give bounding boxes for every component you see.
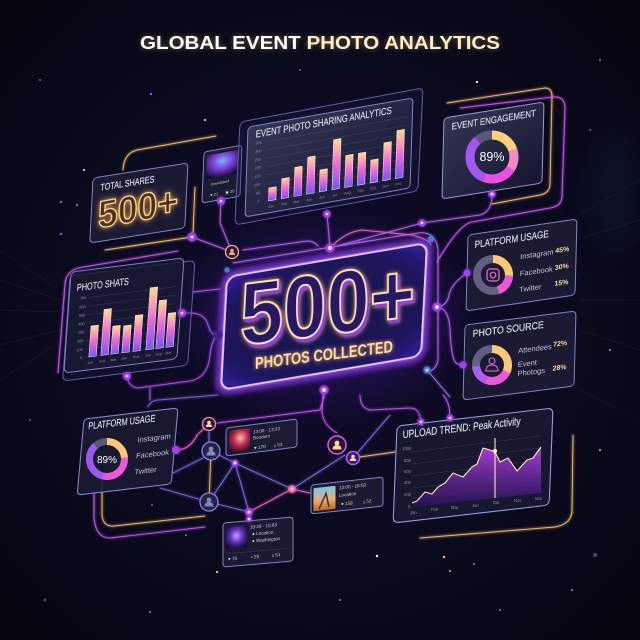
panel: photo card top: ♥ 21 (210, 191, 219, 198)
connector network (58, 88, 573, 538)
bottom network (176, 424, 310, 512)
icon: person node a (202, 418, 216, 430)
bar chart: monthly shares: 150 (254, 174, 261, 179)
legend: platforms: Twitter (519, 282, 542, 294)
card: booths: Boodom (253, 433, 270, 441)
icon: person node c (200, 493, 218, 511)
line chart: uploads over time: 200 (404, 492, 412, 497)
line chart: uploads over time: Jun (472, 503, 479, 508)
card: washington: ▪ 29 (251, 554, 259, 560)
legend: platforms (519, 247, 554, 294)
legend: sources (517, 342, 552, 378)
icon: person node d (328, 436, 346, 454)
card: booths: ⤓ 53 (274, 442, 283, 448)
bar chart: monthly shares: 100 (254, 182, 260, 188)
bar chart: photo shots: Jun (145, 353, 151, 358)
panel: platform usage right: 15% (554, 279, 569, 288)
legend: platforms: Instagram (520, 247, 554, 261)
bar chart: photo shots: 400 (78, 322, 85, 327)
legend: sources: Attendees (518, 342, 552, 355)
line chart: uploads over time (402, 436, 543, 515)
card: washington (223, 517, 293, 567)
heading: event photo sharing analytics: EVENT PHOTO SHARING ANALYTICS (256, 106, 392, 141)
bar chart: monthly shares: Feb (281, 202, 287, 207)
bar chart: monthly shares: Sen (382, 184, 389, 189)
line chart: uploads over time: Mar (535, 496, 543, 501)
gold frame lines (105, 136, 216, 250)
caption: photos collected: PHOTOS COLLECTED (255, 337, 393, 373)
donut: 89% (470, 135, 514, 179)
photo: stage (226, 525, 247, 549)
panel: photo shats (63, 258, 195, 381)
donut: 89% (90, 442, 124, 476)
title: GLOBAL EVENT PHOTO ANALYTICS (140, 33, 500, 53)
heading: platform usage: PLATFORM USAGE (475, 229, 549, 251)
bar chart: monthly shares: 50 (256, 191, 260, 196)
bar chart: photo shots: 700 (80, 296, 86, 301)
bar chart: monthly shares: 250 (255, 157, 261, 163)
card: washington: 10:29 - 15:63 (250, 522, 277, 530)
panel: photo card top: ▣ 20 (225, 188, 235, 195)
panel: upload trend (393, 408, 553, 523)
legend: platforms: Facebook (136, 448, 170, 460)
panel: event photo sharing analytics (235, 88, 423, 225)
bar chart: photo shots: Mar (110, 357, 118, 362)
photo: desert (314, 486, 336, 511)
panel: platform usage right: 30% (555, 263, 570, 272)
bar chart: photo shots: 0 (80, 356, 82, 360)
card: booths: 13:00 - 13:33 (253, 426, 280, 435)
card: location: Location (339, 491, 357, 498)
legend: sources: Photogs (517, 366, 545, 378)
magenta frame lines (58, 97, 565, 538)
nodes (123, 190, 496, 522)
heading: photo shats: PHOTO SHATS (76, 277, 129, 294)
line chart: uploads over time: 1000 (402, 446, 412, 451)
legend: sources: Event (518, 358, 538, 369)
bar chart: photo shots: Jun (121, 356, 127, 361)
panel: event engagement (442, 102, 544, 199)
line chart: uploads over time: 800 (404, 458, 412, 463)
stat: 500+: 500+ (98, 180, 178, 237)
legend: platforms: Instagram (137, 432, 171, 444)
panel: photo source: 72% (553, 340, 568, 349)
card: location: ⤓ 52 (363, 498, 372, 504)
card: booths: ♥ 170 (254, 444, 266, 450)
card: washington: ♥ 75 (228, 556, 238, 562)
legend: platforms: Facebook (520, 264, 553, 278)
heading: total shares: TOTAL SHARES (100, 174, 155, 194)
bar chart: photo shots: 200 (77, 339, 83, 344)
heading: event engagement: EVENT ENGAGEMENT (452, 108, 536, 133)
panel: platform usage right (466, 219, 577, 311)
card: washington: ● Washington (252, 536, 281, 544)
panel: photo source: 28% (552, 364, 567, 373)
bar chart: monthly shares: Oct (370, 186, 376, 191)
panel: platform usage left (77, 408, 178, 495)
bar chart: photo shots: 600 (79, 305, 86, 310)
line chart: uploads over time: Jan (410, 510, 417, 515)
central links (192, 194, 492, 372)
panel: central stat (218, 239, 430, 394)
bar chart: photo shots: Mar (165, 351, 173, 355)
panel: total shares (90, 163, 188, 243)
card: location (311, 477, 383, 514)
bar chart: monthly shares: Apr (306, 197, 313, 202)
line chart: uploads over time: Nov (514, 498, 522, 503)
legend: platforms: Twitter (134, 465, 158, 476)
bar chart: monthly shares: Mar (293, 199, 300, 205)
bar chart: monthly shares: Jan (268, 204, 274, 209)
line chart: uploads over time: Mar (451, 505, 459, 510)
bar chart: photo shots (75, 284, 178, 367)
icon: person node e (346, 452, 360, 464)
bar chart: photo shots: Jan (87, 360, 93, 365)
icon: person node top (226, 246, 238, 258)
bar chart: monthly shares: Aug (344, 190, 351, 196)
bar chart: monthly shares: 0 (257, 200, 260, 204)
bar chart: monthly shares (253, 115, 407, 212)
bar chart: photo shots: Sep (155, 352, 162, 357)
donut: source share (476, 349, 508, 381)
photo: fireworks (229, 428, 250, 453)
bar chart: photo shots: Year (132, 355, 141, 359)
line chart: uploads over time: 600 (404, 469, 412, 474)
bar chart: monthly shares: Jul (332, 193, 337, 198)
heading: platform usage: PLATFORM USAGE (88, 414, 156, 432)
stat: 500+: 500+ (240, 243, 415, 364)
bar chart: monthly shares: Dec (395, 181, 402, 187)
bar chart: monthly shares: 200 (255, 165, 261, 171)
legend: platforms (134, 432, 171, 476)
line chart: uploads over time: Sat (493, 500, 500, 505)
panel: photo source (463, 311, 576, 400)
line chart: uploads over time: 400 (404, 480, 412, 485)
bar chart: photo shots: Fes (99, 359, 106, 364)
panel: photo card top: Uoundstred (211, 179, 229, 187)
line chart: uploads over time: Feb (431, 507, 439, 512)
line chart: uploads over time: 0 (408, 504, 411, 509)
panel: event engagement: 89% (479, 150, 505, 164)
card: location: ♥ 158 (341, 500, 353, 507)
bar chart: photo shots: 100 (76, 348, 83, 353)
card: washington: ● Location (252, 530, 274, 537)
photo: concert (206, 150, 239, 179)
icon: person (486, 358, 498, 371)
panel: photo card top (202, 145, 242, 203)
heading: upload trend: UPLOAD TREND: Peak Activity (402, 416, 521, 441)
card: washington: ⤓ 51 (272, 552, 281, 558)
card: booths (226, 419, 297, 456)
panel: platform usage left: 89% (97, 455, 117, 466)
card: location: 13:00 - 16:50 (339, 482, 367, 490)
bar chart: photo shots: 500 (79, 313, 85, 318)
donut: platform share (477, 259, 509, 291)
bar chart: monthly shares: 300 (255, 140, 262, 146)
bar chart: photo shots: 300 (77, 330, 84, 335)
bar chart: monthly shares: 300 (255, 149, 262, 154)
bar chart: monthly shares: Jun (319, 195, 325, 200)
panel: platform usage right: 45% (555, 246, 570, 255)
icon: instagram (487, 269, 499, 281)
bar chart: monthly shares: Sep (357, 188, 364, 193)
icon: person node b (202, 442, 220, 460)
heading: photo source: PHOTO SOURCE (473, 320, 544, 340)
